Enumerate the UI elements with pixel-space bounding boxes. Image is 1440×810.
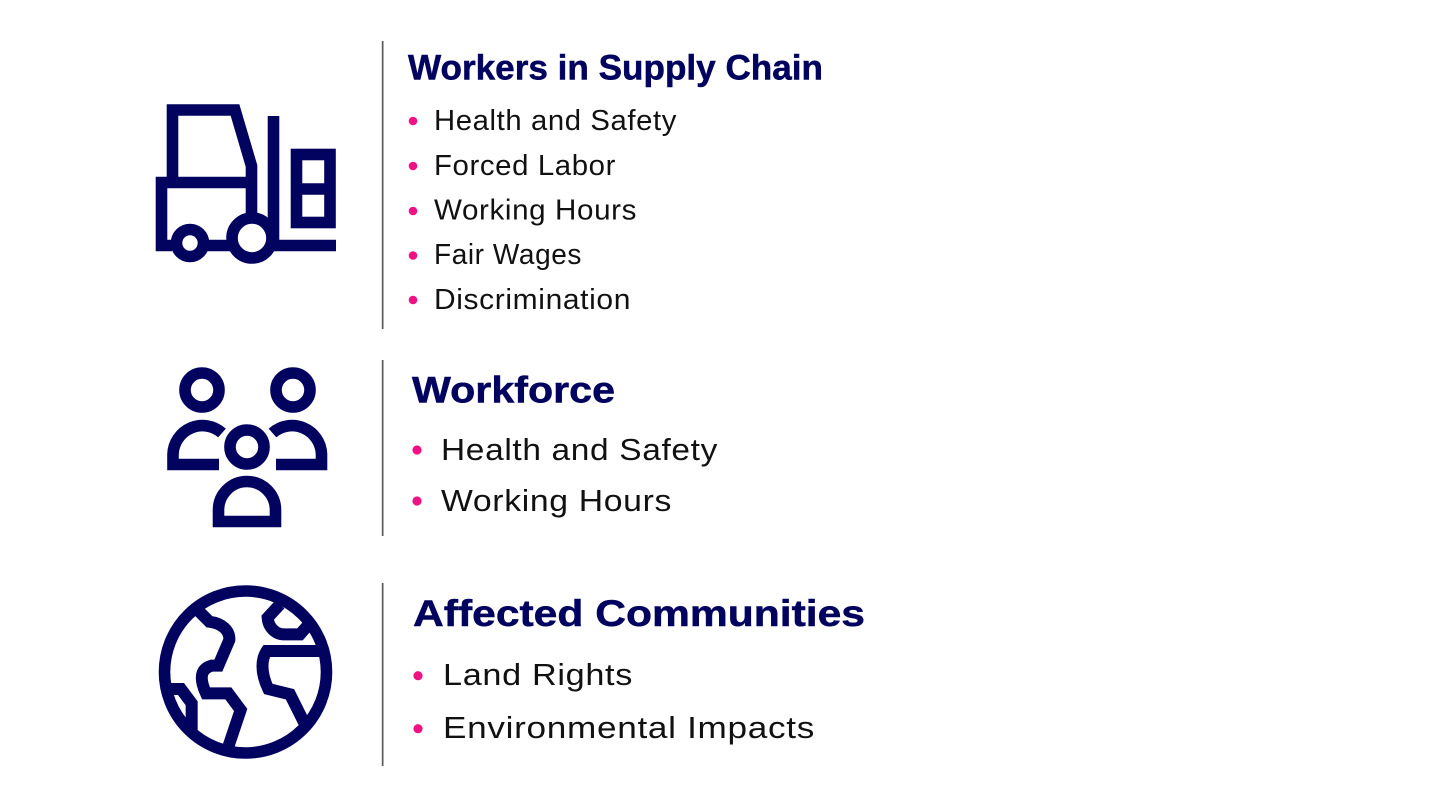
- list: workforce topics: Working Hours: [441, 483, 672, 518]
- heading: workforce: Workforce: [412, 370, 615, 410]
- heading: affected communities: Affected Communities: [413, 593, 865, 634]
- list: community topics: [413, 657, 815, 745]
- list: community topics: Land Rights: [443, 657, 633, 692]
- list: supply chain topics: Discrimination: [434, 284, 631, 316]
- list: supply chain topics: [409, 105, 677, 316]
- list: community topics: Environmental Impacts: [443, 710, 815, 745]
- list: supply chain topics: Working Hours: [434, 194, 637, 226]
- list: supply chain topics: Forced Labor: [434, 150, 616, 182]
- icon: three people: [173, 373, 322, 522]
- list: workforce topics: [412, 432, 718, 518]
- list: supply chain topics: Fair Wages: [434, 239, 582, 271]
- panel: workforce: [173, 360, 718, 536]
- panel: affected communities: [164, 583, 865, 766]
- heading: workers in supply chain: Workers in Supply Chain: [408, 48, 823, 88]
- panel: workers in supply chain: [162, 41, 823, 329]
- icon: globe: [164, 591, 326, 753]
- icon: forklift: [162, 110, 336, 258]
- list: supply chain topics: Health and Safety: [434, 105, 677, 137]
- list: workforce topics: Health and Safety: [441, 432, 718, 467]
